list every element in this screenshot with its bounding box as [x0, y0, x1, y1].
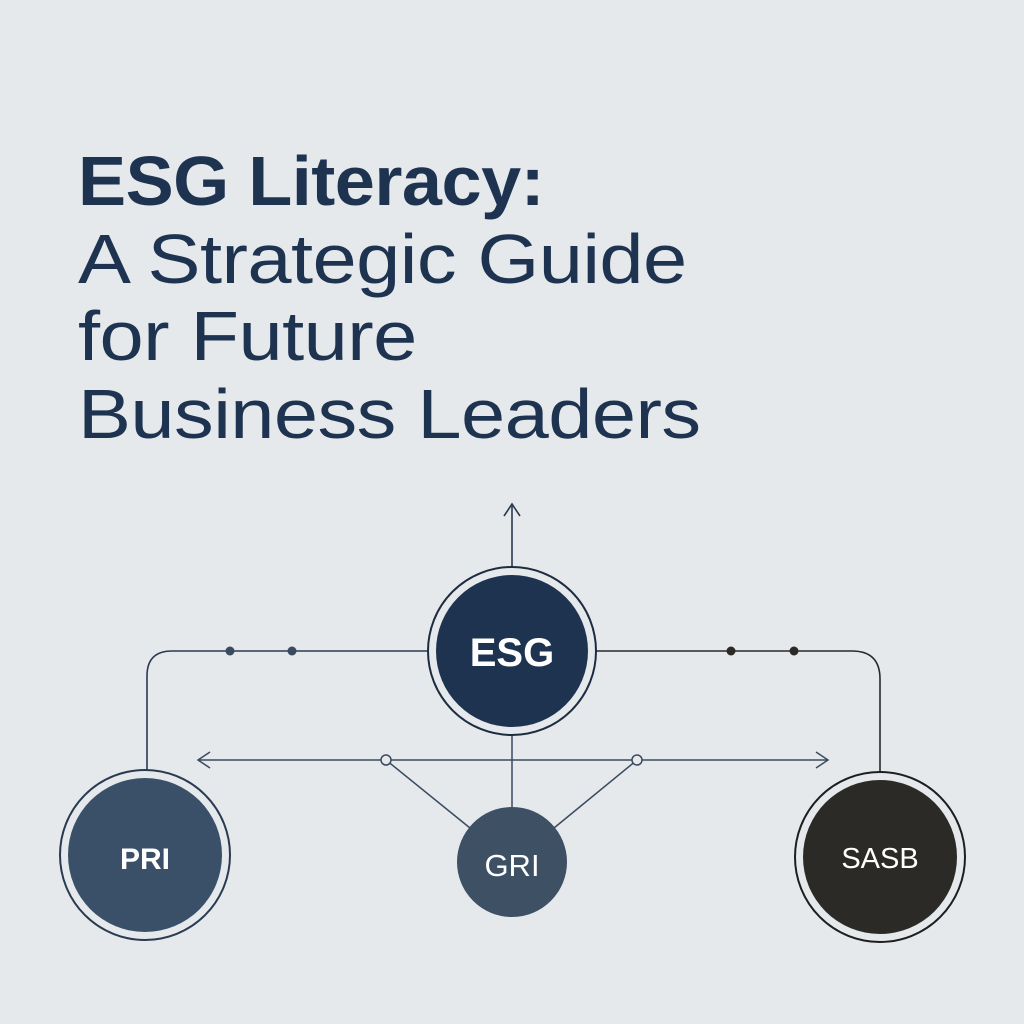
connector: ESG to PRI [147, 646, 428, 772]
title line 3: for Future [78, 297, 417, 375]
connector: ESG to SASB [596, 646, 880, 772]
node: ESG: ESG [470, 631, 554, 675]
double arrow line [198, 752, 828, 768]
connectors to GRI [381, 735, 642, 828]
title line 1: ESG Literacy: [78, 142, 544, 220]
node: PRI: PRI [120, 843, 170, 876]
node: SASB [795, 772, 965, 942]
node: GRI [457, 807, 567, 917]
title line 2: A Strategic Guide [78, 220, 687, 298]
node: GRI: GRI [484, 848, 540, 883]
node: PRI [60, 770, 230, 940]
title [78, 142, 700, 453]
arrow: up [504, 504, 520, 567]
node: SASB: SASB [841, 843, 919, 875]
node: ESG [428, 567, 596, 735]
title line 4: Business Leaders [78, 375, 700, 453]
